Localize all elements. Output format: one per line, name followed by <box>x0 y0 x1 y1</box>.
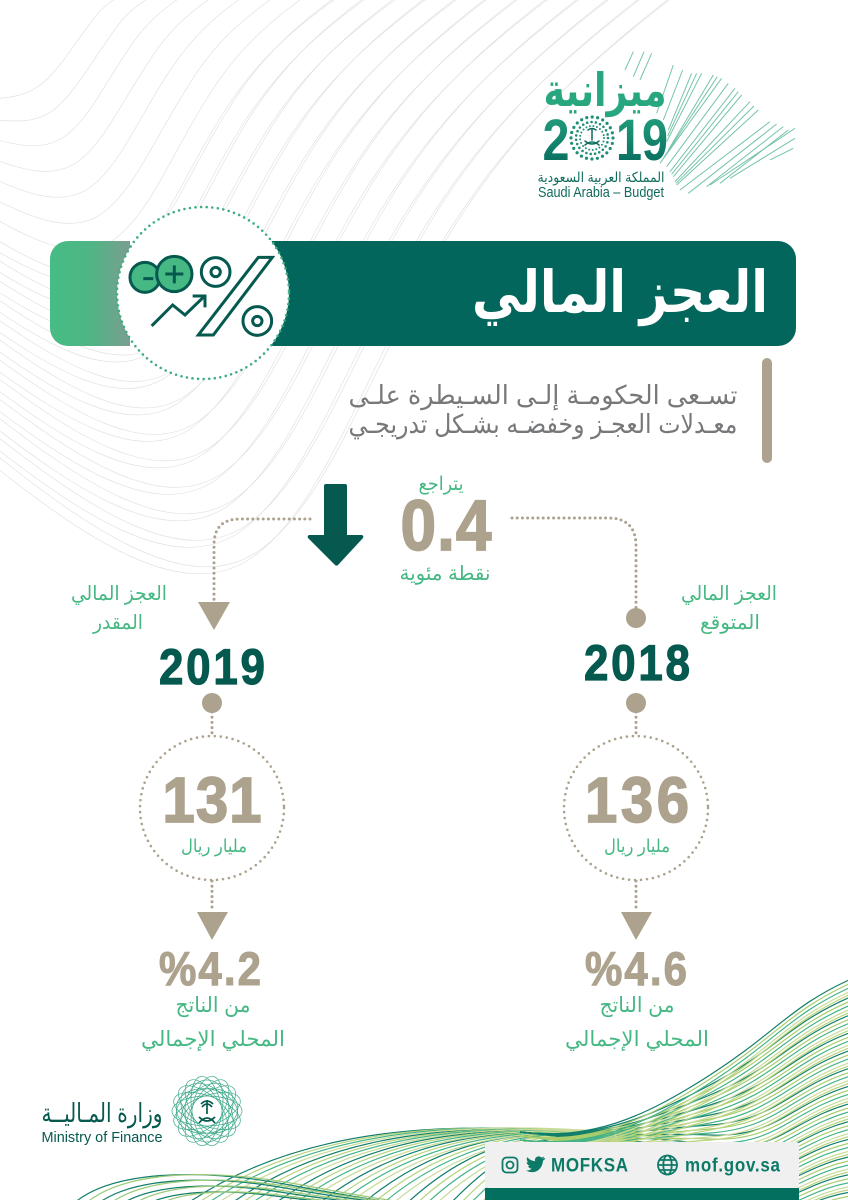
background: green ribbon waves <box>72 975 848 1200</box>
GDP label 2018 line 1: من الناتج <box>600 994 674 1017</box>
ministry Arabic name: وزارة المـاليــة <box>42 1098 162 1129</box>
tan side bar <box>762 358 772 463</box>
description text with side bar <box>348 358 772 463</box>
GDP label 2019 line 1: من الناتج <box>176 994 250 1017</box>
dot 2019 <box>202 693 222 713</box>
icon: coins, growth arrow and percent <box>130 256 272 335</box>
icon: twitter <box>526 1156 545 1172</box>
logo: Saudi budget 2019 <box>538 52 795 201</box>
description line 2: معـدلات العجـز وخفضـه بشـكل تدريجـي <box>348 409 738 440</box>
unit 2019: مليار ريال <box>181 836 247 856</box>
logo digit 2: 2 <box>542 108 570 173</box>
column: 2019 <box>71 583 285 1051</box>
value 0.4: 0.4 <box>401 486 492 566</box>
dot 2018 upper <box>626 608 646 628</box>
Ministry of Finance logo <box>42 1073 245 1149</box>
icon: instagram <box>502 1158 518 1172</box>
column: 2018 <box>564 583 777 1051</box>
label 2018 line 2: المتوقع <box>700 612 760 634</box>
year 2018: 2018 <box>584 634 690 691</box>
label: declines: يتراجع <box>418 474 464 495</box>
dot 2018 <box>626 693 646 713</box>
ministry emblem <box>169 1073 245 1149</box>
unit 2018: مليار ريال <box>604 836 670 856</box>
GDP label 2018 line 2: المحلي الإجمالي <box>565 1028 709 1051</box>
logo English caption: Saudi Arabia – Budget <box>538 184 665 201</box>
percent 4.6: %4.6 <box>585 944 687 996</box>
title banner <box>50 207 796 379</box>
footer grey panel <box>485 1142 799 1188</box>
logo Arabic caption: المملكة العربية السعودية <box>538 169 664 186</box>
handle text: MOFKSA <box>551 1153 628 1176</box>
GDP label 2019 line 2: المحلي الإجمالي <box>141 1028 285 1051</box>
value 131: 131 <box>163 764 262 836</box>
percent 4.2: %4.2 <box>159 944 261 996</box>
banner title: العجز المالي <box>472 260 768 327</box>
label 2019 line 1: العجز المالي <box>71 583 167 606</box>
dotted circle 2018 <box>564 736 708 880</box>
triangle marker 2019 <box>198 602 230 630</box>
decline callout <box>308 474 492 585</box>
description line 1: تسـعى الحكومـة إلـى السـيطرة علـى <box>348 380 738 411</box>
banner left green section <box>50 241 130 346</box>
footer contact box <box>485 1142 799 1200</box>
label 2019 line 2: المقدر <box>92 612 143 634</box>
logo map stripes <box>625 52 795 193</box>
dotted icon circle <box>117 207 289 379</box>
year 2019: 2019 <box>159 638 265 695</box>
banner dark section <box>270 241 796 346</box>
logo digits 19: 19 <box>616 108 668 173</box>
triangle 2019 lower <box>197 912 228 940</box>
logo star emblem <box>571 117 613 159</box>
dotted circle 2019 <box>140 736 284 880</box>
dotted connectors <box>212 518 636 912</box>
triangle 2018 lower <box>621 912 652 940</box>
website text: mof.gov.sa <box>685 1153 781 1176</box>
label 2018 line 1: العجز المالي <box>681 583 777 606</box>
logo word: budget: ميزانية <box>544 64 666 117</box>
down arrow <box>308 484 363 566</box>
ministry English name: Ministry of Finance <box>42 1129 162 1146</box>
footer green strip <box>485 1188 799 1200</box>
icon: globe <box>658 1156 677 1174</box>
label: percentage point: نقطة مئوية <box>400 563 490 585</box>
background: grey contour lines <box>0 0 680 574</box>
value 136: 136 <box>585 764 689 836</box>
